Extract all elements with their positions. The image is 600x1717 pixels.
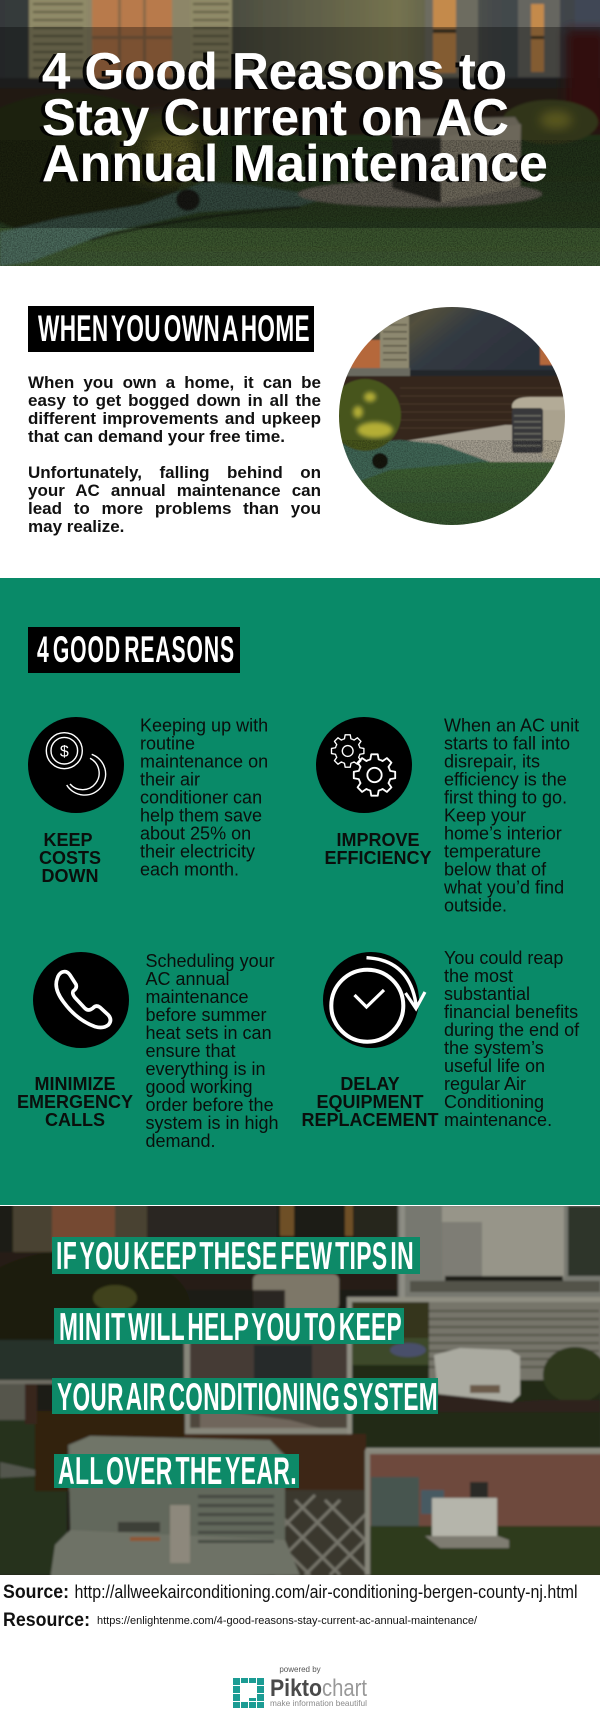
text: keep costs down xyxy=(140,716,268,880)
text: keep costs down: their electricity xyxy=(140,842,255,862)
text: improve efficiency: below that of xyxy=(444,860,547,880)
text: keep costs down: conditioner can xyxy=(140,788,262,808)
label: improve efficiency: IMPROVE xyxy=(336,830,420,850)
source credits: Source: xyxy=(3,1582,69,1603)
intro text: lead to more problems than you xyxy=(28,499,321,518)
label: delay equipment replacement: REPLACEMENT xyxy=(301,1110,439,1130)
text: minimize emergency calls xyxy=(146,951,279,1151)
label: delay equipment replacement: DELAY xyxy=(340,1074,400,1094)
intro text: that can demand your free time. xyxy=(28,427,285,446)
title: Annual Maintenance xyxy=(42,135,548,193)
intro text: easy to get bogged down in all the xyxy=(28,391,321,410)
text: improve efficiency: Keep your xyxy=(444,806,526,826)
photo collage of generators xyxy=(0,1206,600,1575)
label: minimize emergency calls xyxy=(17,1074,133,1130)
middle right generator and siding xyxy=(347,1297,600,1453)
icon: phone xyxy=(33,952,129,1048)
icon: gears xyxy=(316,717,412,813)
wordmark: make information beautiful xyxy=(270,1698,367,1708)
text: minimize emergency calls: AC annual xyxy=(146,969,230,989)
centre photo xyxy=(184,1342,354,1434)
source credits xyxy=(3,1582,578,1631)
wordmark xyxy=(270,1675,367,1708)
label: minimize emergency calls: EMERGENCY xyxy=(17,1092,133,1112)
title xyxy=(38,43,548,193)
wordmark: Pikto xyxy=(270,1675,322,1702)
icon: piktochart mark xyxy=(233,1678,264,1708)
text: improve efficiency: disrepair, its xyxy=(444,752,540,772)
text: delay equipment replacement: the system’s xyxy=(444,1038,544,1058)
text: minimize emergency calls: before summer xyxy=(146,1005,267,1025)
label: minimize emergency calls: MINIMIZE xyxy=(34,1074,116,1094)
header panel xyxy=(0,0,600,266)
text: keep costs down: routine xyxy=(140,734,195,754)
text: delay equipment replacement: during the end of xyxy=(444,1020,580,1040)
text: improve efficiency: temperature xyxy=(444,842,541,862)
panel: when you own a home xyxy=(28,306,565,536)
top right generator xyxy=(398,1200,600,1300)
intro text: may realize. xyxy=(28,517,124,536)
bottom left generator xyxy=(275,1490,367,1580)
intro text: your AC annual maintenance can xyxy=(28,481,321,500)
header photo: house at dusk with AC unit xyxy=(0,0,600,266)
text: delay equipment replacement: substantial xyxy=(444,984,530,1004)
text: delay equipment replacement xyxy=(444,948,580,1130)
text: improve efficiency: efficiency is the xyxy=(444,770,567,790)
text: minimize emergency calls: Scheduling your xyxy=(146,951,275,971)
text: delay equipment replacement: financial benefits xyxy=(444,1002,578,1022)
piktochart logo xyxy=(233,1665,367,1708)
reason: improve efficiency xyxy=(316,717,579,916)
top left night house xyxy=(0,1200,405,1440)
panel: closing photo collage xyxy=(0,1206,600,1575)
source credits: Resource: xyxy=(3,1610,90,1631)
source credits: https://enlightenme.com/4-good-reasons-stay-current-ac-annual-maintenance/ xyxy=(97,1615,478,1627)
icon: clock with arrow xyxy=(323,952,425,1048)
left wood fence section xyxy=(0,1380,184,1384)
icon: coins xyxy=(28,717,124,813)
text: delay equipment replacement: You could reap xyxy=(444,948,563,968)
text: minimize emergency calls: ensure that xyxy=(146,1041,236,1061)
label: delay equipment replacement xyxy=(301,1074,439,1130)
wordmark: chart xyxy=(322,1675,367,1702)
label: keep costs down: DOWN xyxy=(42,866,98,886)
text: delay equipment replacement: maintenance. xyxy=(444,1110,552,1130)
reason: delay equipment replacement xyxy=(301,948,580,1130)
text: delay equipment replacement: Conditioning xyxy=(444,1092,544,1112)
label: keep costs down: KEEP xyxy=(43,830,93,850)
intro text: Unfortunately, falling behind on xyxy=(28,463,321,482)
intro text: different improvements and upkeep xyxy=(28,409,321,428)
label: improve efficiency xyxy=(324,830,432,868)
label: keep costs down: COSTS xyxy=(39,848,101,868)
text: keep costs down: help them save xyxy=(140,806,262,826)
text: keep costs down: their air xyxy=(140,770,200,790)
text: minimize emergency calls: everything is in xyxy=(146,1059,266,1079)
label: delay equipment replacement: EQUIPMENT xyxy=(316,1092,424,1112)
label: improve efficiency: EFFICIENCY xyxy=(324,848,432,868)
text: improve efficiency: outside. xyxy=(444,896,507,916)
text: improve efficiency: home’s interior xyxy=(444,824,562,844)
label: minimize emergency calls: CALLS xyxy=(45,1110,105,1130)
reason: minimize emergency calls xyxy=(17,951,279,1151)
text: improve efficiency: first thing to go. xyxy=(444,788,567,808)
text: keep costs down: each month. xyxy=(140,860,239,880)
text: minimize emergency calls: system is in high xyxy=(146,1113,279,1133)
text: minimize emergency calls: maintenance xyxy=(146,987,249,1007)
text: improve efficiency xyxy=(443,716,579,916)
text: minimize emergency calls: good working xyxy=(146,1077,253,1097)
text: delay equipment replacement: useful life on xyxy=(444,1056,545,1076)
label: keep costs down xyxy=(39,830,101,886)
circular photo of AC unit xyxy=(339,307,565,525)
title: Stay Current on AC xyxy=(42,89,509,147)
intro text: When you own a home, it can be xyxy=(28,373,321,392)
text: delay equipment replacement: regular Air xyxy=(444,1074,526,1094)
text: delay equipment replacement: the most xyxy=(444,966,513,986)
icon: coins: $ xyxy=(60,744,69,760)
text: minimize emergency calls: order before the xyxy=(146,1095,274,1115)
text: improve efficiency: what you’d find xyxy=(443,878,564,898)
text: minimize emergency calls: heat sets in can xyxy=(146,1023,272,1043)
panel: 4 good reasons xyxy=(0,578,600,1205)
text: minimize emergency calls: demand. xyxy=(146,1131,216,1151)
text: keep costs down: maintenance on xyxy=(140,752,268,772)
intro text xyxy=(28,373,321,536)
text: improve efficiency: starts to fall into xyxy=(444,734,570,754)
text: keep costs down: about 25% on xyxy=(140,824,251,844)
piktochart logo: powered by xyxy=(279,1665,321,1674)
title: 4 Good Reasons to xyxy=(42,43,507,101)
reason: keep costs down xyxy=(28,717,268,886)
bottom right generator xyxy=(365,1450,600,1575)
